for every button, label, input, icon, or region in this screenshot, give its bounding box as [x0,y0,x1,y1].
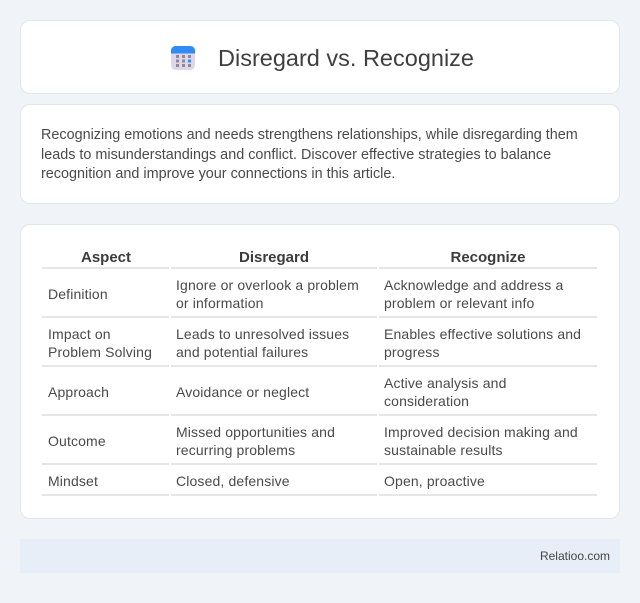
row: impact on problem solving: Leads to unresolved issues [176,326,349,342]
panel: title card [20,20,620,94]
row: mindset [48,473,485,489]
intro text: Recognizing emotions and needs strengthens relationships, while disregarding them [41,127,578,143]
row: outcome [48,424,578,458]
row: definition: problem or relevant info [384,295,534,311]
row: mindset: Open, proactive [384,473,485,489]
panel: introduction [20,104,620,204]
row: approach: Approach [48,384,109,400]
row: approach: consideration [384,393,469,409]
row: mindset: Closed, defensive [176,473,290,489]
row: outcome: Outcome [48,433,106,449]
row: approach: Active analysis and [384,375,507,391]
table header: Recognize [450,249,526,266]
table header [81,249,526,266]
row: outcome: recurring problems [176,442,295,458]
row: mindset: Mindset [48,473,98,489]
row: approach: Avoidance or neglect [176,384,309,400]
icon: calendar [171,46,195,70]
title: Disregard vs. Recognize [218,45,474,71]
row: outcome: Improved decision making and [384,424,578,440]
row: impact on problem solving: Impact on [48,326,111,342]
row: definition: Ignore or overlook a problem [176,277,359,293]
intro text: leads to misunderstandings and conflict. Discover effective strategies to balance [41,147,551,163]
row: impact on problem solving: Problem Solving [48,344,152,360]
row: definition [48,277,564,311]
footer bar [20,539,620,573]
row: definition: Definition [48,286,108,302]
row: impact on problem solving [48,326,581,360]
row: impact on problem solving: and potential failures [176,344,308,360]
footer credit: Relatioo.com [540,549,610,563]
intro text: recognition and improve your connections in this article. [41,166,395,182]
row: definition: or information [176,295,264,311]
row: impact on problem solving: progress [384,344,440,360]
table header: Disregard [239,249,309,266]
row: impact on problem solving: Enables effective solutions and [384,326,581,342]
table header: Aspect [81,249,131,266]
intro text [41,127,578,182]
row: definition: Acknowledge and address a [384,277,563,293]
row: outcome: Missed opportunities and [176,424,335,440]
row: outcome: sustainable results [384,442,503,458]
panel: comparison table [20,224,620,519]
row: approach [48,375,507,409]
